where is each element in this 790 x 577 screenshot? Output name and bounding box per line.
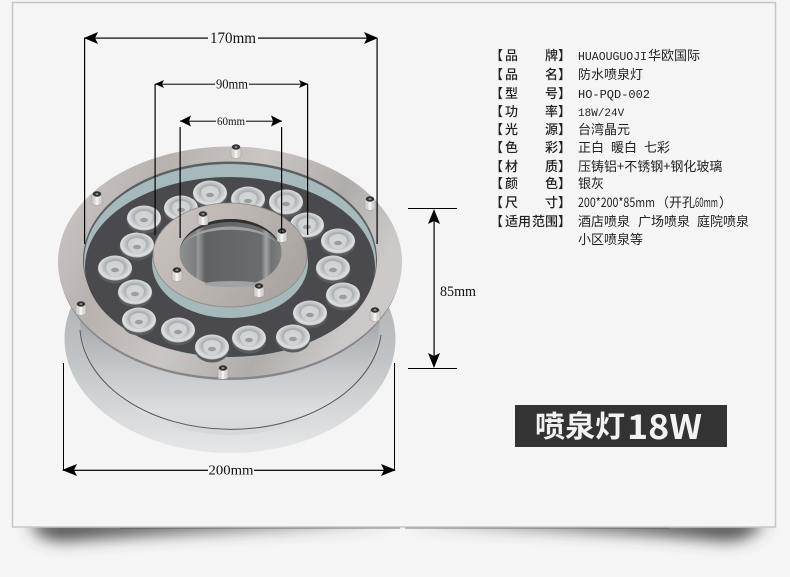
dimension: 85mm	[408, 208, 476, 369]
spec labels: 颜	[505, 173, 518, 192]
inner glass	[152, 208, 308, 318]
spec values: HO-PQD-002	[578, 88, 650, 102]
spec labels: 彩	[545, 137, 558, 156]
spec labels: 【	[490, 64, 503, 83]
spec values: 广场喷泉	[638, 211, 690, 230]
dimension: 170mm: 170mm	[210, 30, 257, 47]
spec values: 60mm	[695, 192, 718, 211]
spec labels: 【	[490, 211, 503, 230]
dimension: 170mm	[84, 28, 378, 244]
product photo: fountain light	[58, 144, 402, 453]
spec values: 小区喷泉等	[578, 229, 643, 248]
spec values: 台湾晶元	[578, 119, 630, 138]
glass ring	[83, 162, 377, 358]
spec labels: 【	[490, 119, 503, 138]
spec values: 18W/24V	[578, 108, 625, 120]
spec labels: 品	[505, 64, 518, 83]
inner flange	[153, 203, 307, 307]
centre hole	[180, 219, 282, 287]
spec labels: 适	[505, 211, 518, 230]
spec values: 银灰	[578, 173, 604, 192]
spec labels: 名	[545, 64, 558, 83]
spec labels: 【	[490, 173, 503, 192]
spec values: 暖白	[611, 137, 637, 156]
spec values: 压铸铝+不锈钢+钢化玻璃	[578, 156, 722, 175]
spec labels: 型	[505, 83, 518, 102]
dimension: 60mm: 60mm	[217, 114, 246, 128]
panel shadow	[30, 520, 765, 540]
spec values: 正白	[578, 137, 604, 156]
title badge	[515, 400, 727, 449]
title badge: 喷泉灯	[535, 402, 625, 446]
spec labels: 】	[558, 83, 571, 102]
spec labels	[490, 45, 571, 230]
lower body housing	[80, 318, 380, 435]
spec labels: 围	[545, 211, 558, 230]
spec labels: 质	[545, 156, 558, 175]
spec values	[578, 49, 749, 248]
spec labels: 材	[505, 156, 518, 175]
dimension: 90mm	[154, 76, 308, 235]
spec labels: 率	[545, 101, 558, 120]
spec labels: 范	[532, 211, 545, 230]
spec labels: 【	[490, 137, 503, 156]
upper flange ring	[58, 146, 402, 378]
spec labels: 源	[545, 119, 558, 138]
dimension: 60mm	[180, 114, 282, 238]
lens array	[98, 180, 360, 362]
spec labels: 】	[558, 101, 571, 120]
spec labels: 【	[490, 45, 503, 64]
spec labels: 【	[490, 192, 503, 211]
spec labels: 】	[558, 119, 571, 138]
spec values: 庭院喷泉	[697, 211, 749, 230]
bolts	[76, 144, 380, 379]
spec labels: 尺	[505, 192, 518, 211]
spec labels: 】	[558, 64, 571, 83]
spec labels: 用	[518, 211, 531, 230]
spec values: 酒店喷泉	[578, 211, 630, 230]
spec values: 华欧国际	[648, 49, 700, 64]
spec labels: 寸	[545, 192, 558, 211]
spec labels: 】	[558, 173, 571, 192]
spec labels: 【	[490, 83, 503, 102]
title badge: 18W	[627, 400, 702, 449]
spec labels: 【	[490, 101, 503, 120]
spec labels: 】	[558, 211, 571, 230]
spec labels: 】	[558, 137, 571, 156]
upper flange underside	[59, 150, 401, 380]
dimension: 90mm: 90mm	[216, 78, 248, 92]
spec values: （开孔	[656, 192, 695, 211]
spec labels: 品	[505, 45, 518, 64]
spec labels: 号	[545, 83, 558, 102]
spec values: ）	[719, 192, 732, 211]
spec labels: 光	[505, 119, 518, 138]
spec labels: 【	[490, 156, 503, 175]
dimension: 85mm: 85mm	[440, 284, 476, 300]
spec labels: 】	[558, 156, 571, 175]
spec values: HUAOUGUOJI	[578, 51, 647, 64]
lower body flange	[64, 225, 396, 453]
dimension: 200mm: 200mm	[208, 464, 254, 478]
dimension: 200mm	[62, 363, 396, 480]
spec labels: 】	[558, 45, 571, 64]
spec labels: 色	[545, 173, 558, 192]
spec labels: 牌	[545, 45, 558, 64]
spec labels: 功	[505, 101, 518, 120]
spec labels: 色	[505, 137, 518, 156]
spec values: 七彩	[644, 137, 670, 156]
spec labels: 】	[558, 192, 571, 211]
spec list	[490, 45, 749, 248]
dark lens floor	[85, 177, 375, 357]
spec values: 防水喷泉灯	[578, 64, 643, 83]
spec values: 200*200*85mm	[578, 192, 655, 211]
